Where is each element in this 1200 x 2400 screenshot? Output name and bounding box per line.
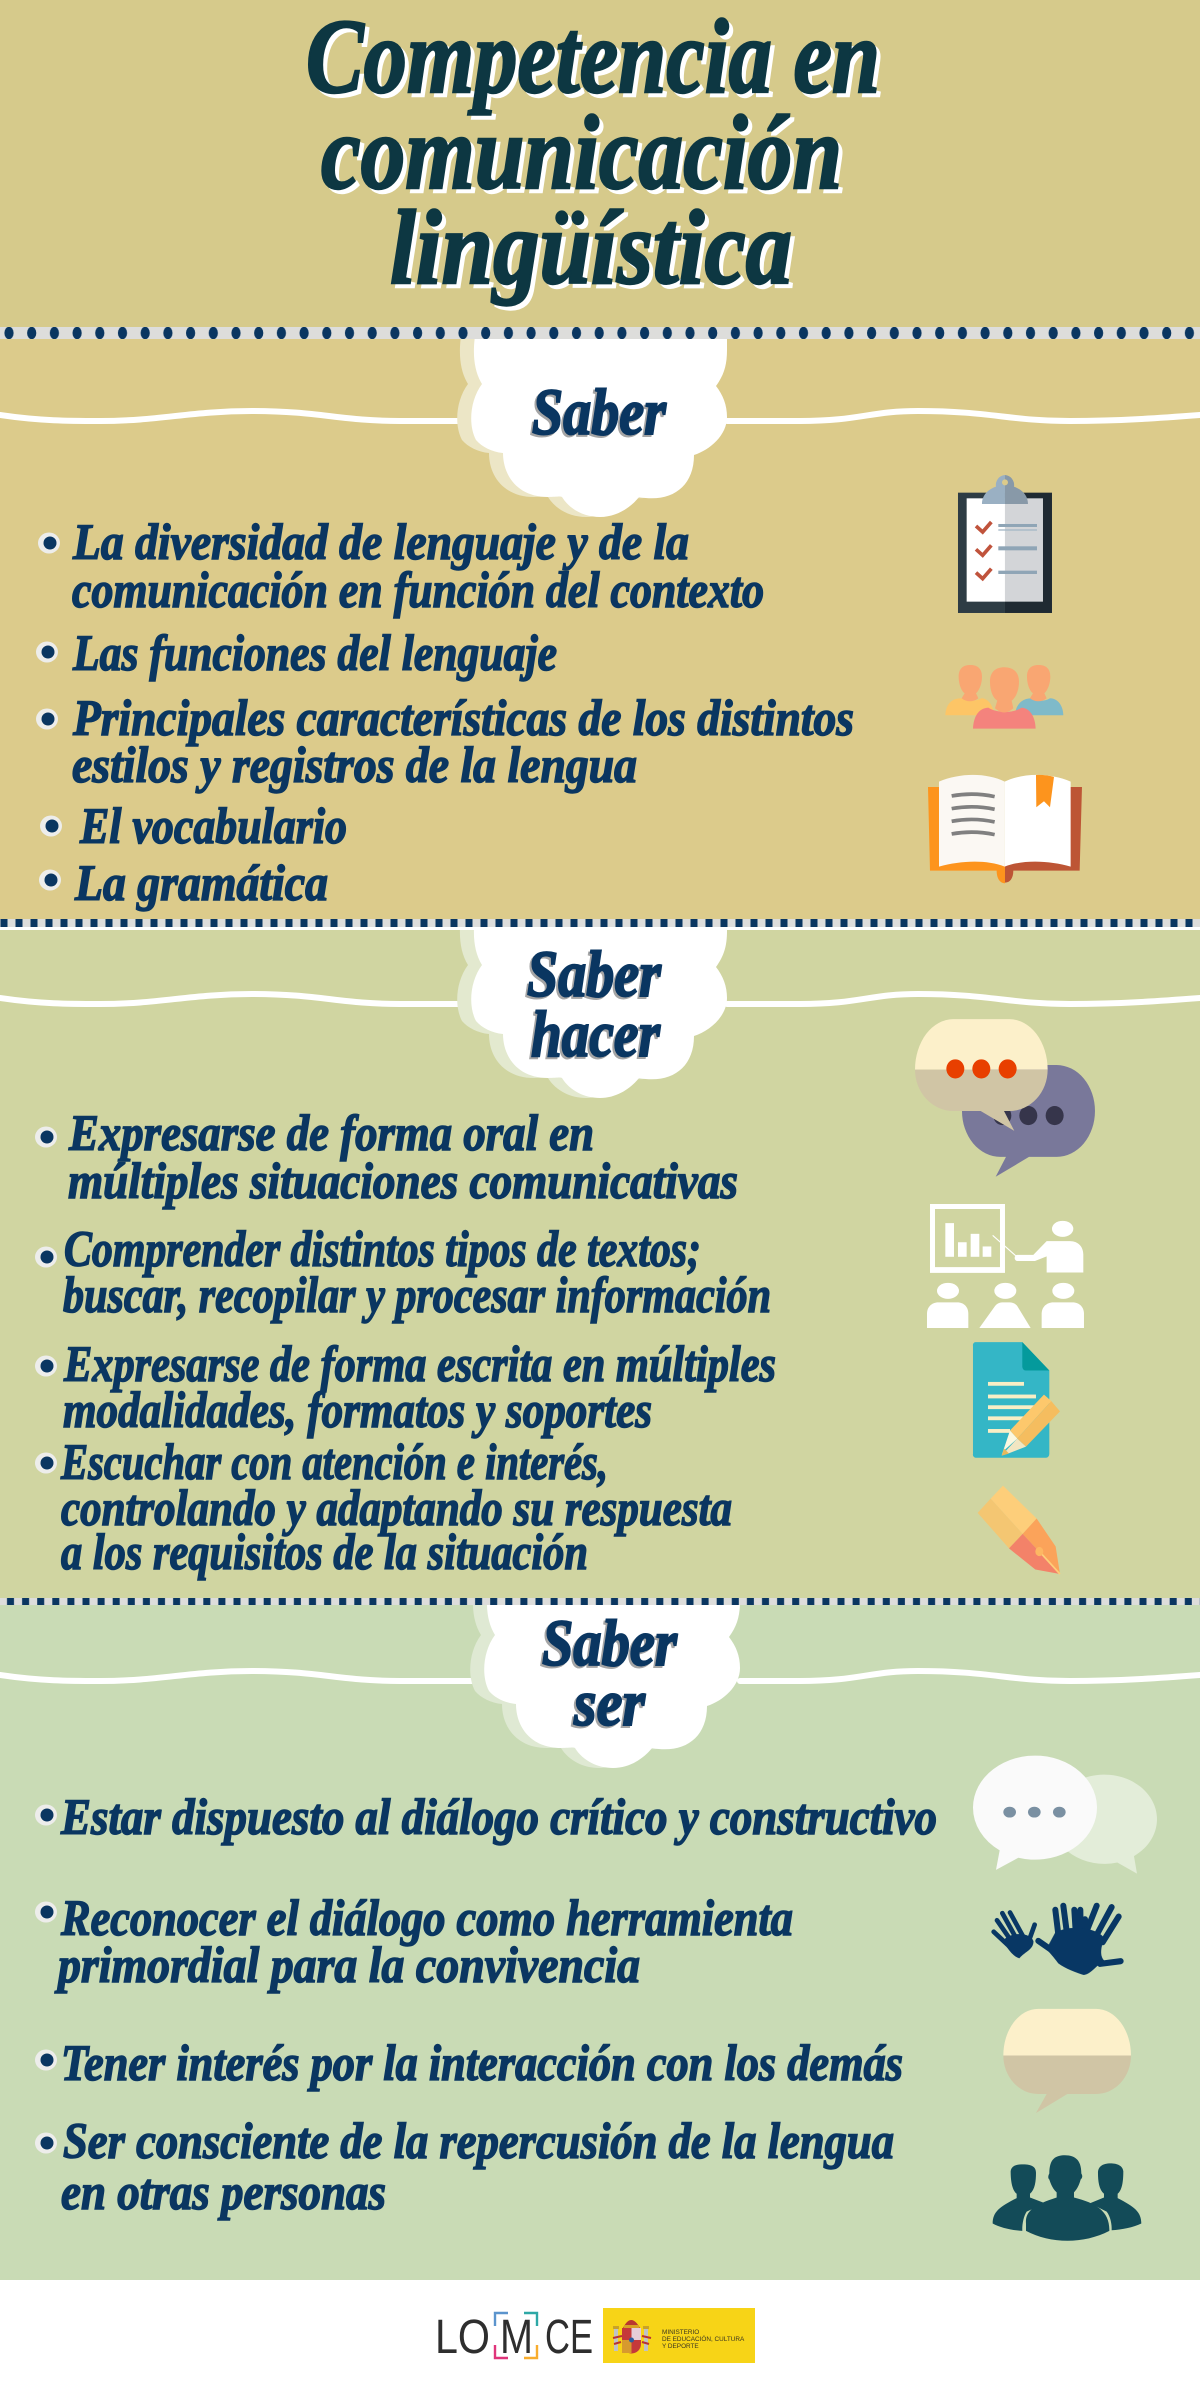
- bullet item 2: buscar, recopilar y procesar información: [63, 1268, 771, 1324]
- panel: saber hacer: [0, 901, 1200, 1606]
- bullet item 4: controlando y adaptando su respuesta: [61, 1481, 732, 1537]
- logo: LOMCE: M: [500, 2311, 533, 2364]
- panel: saber: [0, 320, 1200, 927]
- bullet item 2: Reconocer el diálogo como herramienta: [60, 1891, 793, 1947]
- icon: speech bubbles with dots: [915, 1019, 1095, 1177]
- heading: saber hacer: hacer: [531, 998, 661, 1071]
- bullet item 3: modalidades, formatos y soportes: [63, 1383, 652, 1439]
- title: lingüística: [390, 189, 792, 306]
- icon: group of people: [945, 665, 1063, 729]
- bullet item 2: Las funciones del lenguaje: [72, 626, 557, 682]
- cloud: saber: [457, 320, 727, 517]
- cloud: saber ser: [470, 1605, 740, 1768]
- bullet item 2: [35, 1891, 793, 1994]
- bullet item 4: Ser consciente de la repercusión de la lengua: [63, 2114, 894, 2170]
- bullet item 2: Comprender distintos tipos de textos;: [64, 1222, 701, 1278]
- bullet item 1: [35, 1106, 738, 1210]
- bullet item 3: [36, 691, 854, 794]
- cloud: saber hacer: [457, 930, 727, 1098]
- heading: saber ser: ser: [573, 1667, 646, 1740]
- heading: saber hacer: [527, 938, 662, 1071]
- icon: raised hands: [994, 1906, 1121, 1975]
- icon: people silhouettes: [993, 2155, 1141, 2241]
- logo: ministerio: Y DEPORTE: [662, 2343, 699, 2350]
- bullet item 4: [35, 1435, 732, 1581]
- icon: coat of arms: [613, 2320, 651, 2354]
- logo: ministerio: MINISTERIO: [662, 2329, 699, 2336]
- bullet item 1: comunicación en función del contexto: [72, 563, 764, 619]
- bullet item 4: en otras personas: [61, 2165, 386, 2221]
- bullet item 4: [35, 2114, 894, 2221]
- logo: LOMCE: LO: [435, 2311, 490, 2364]
- icon: white speech bubbles: [973, 1756, 1157, 1874]
- bullet item 1: Expresarse de forma oral en: [68, 1106, 594, 1162]
- bullet item 1: [38, 515, 764, 619]
- list: saber hacer bullets: [35, 1106, 776, 1581]
- wave line: saber: [0, 411, 1200, 421]
- list: saber bullets: [36, 515, 854, 912]
- bullet item 4: a los requisitos de la situación: [61, 1525, 588, 1581]
- panel: footer logos: [0, 2280, 1200, 2400]
- bullet item 3: Expresarse de forma escrita en múltiples: [63, 1337, 776, 1393]
- icon: clipboard: [958, 475, 1052, 613]
- bullet item 3: Tener interés por la interacción con los demás: [61, 2036, 903, 2092]
- heading: saber: Saber: [532, 376, 667, 449]
- heading: saber ser: Saber: [542, 1607, 678, 1680]
- bullet item 2: primordial para la convivencia: [54, 1938, 640, 1994]
- bullet item 1: La diversidad de lenguaje y de la: [72, 515, 689, 571]
- panel: title header: [0, 0, 1200, 327]
- logo: LOMCE: [435, 2311, 593, 2364]
- wave line: saber ser: [0, 1671, 1200, 1681]
- bullet item 2: [35, 1222, 771, 1324]
- logo: ministerio: DE EDUCACIÓN, CULTURA: [662, 2334, 745, 2343]
- heading: saber ser: [542, 1607, 678, 1740]
- bullet item 5: La gramática: [74, 856, 328, 912]
- bullet item 1: Estar dispuesto al diálogo crítico y constructivo: [60, 1790, 937, 1846]
- icon: fountain pen: [978, 1486, 1060, 1574]
- icon: cream speech bubble: [1003, 2009, 1131, 2113]
- logo: ministerio: [603, 2308, 755, 2363]
- heading: saber hacer: Saber: [527, 938, 662, 1011]
- bullet item 3: estilos y registros de la lengua: [72, 738, 637, 794]
- wave line: saber hacer: [0, 994, 1200, 1004]
- bullet item 3: [35, 1337, 776, 1439]
- icon: document with pencil: [973, 1342, 1060, 1458]
- bullet item 3: Principales características de los distintos: [72, 691, 854, 747]
- icon: open book: [928, 775, 1082, 883]
- bullet item 4: El vocabulario: [79, 799, 347, 855]
- title: Competencia en: [306, 0, 880, 115]
- bullet item 1: múltiples situaciones comunicativas: [68, 1154, 738, 1210]
- icon: presenter and audience: [927, 1204, 1084, 1328]
- list: saber ser bullets: [35, 1790, 937, 2221]
- panel: saber ser: [0, 1571, 1200, 2280]
- logo: LOMCE: CE: [545, 2311, 593, 2364]
- title: comunicación: [321, 94, 842, 211]
- bullet item 4: Escuchar con atención e interés,: [60, 1435, 608, 1491]
- title: [306, 0, 880, 306]
